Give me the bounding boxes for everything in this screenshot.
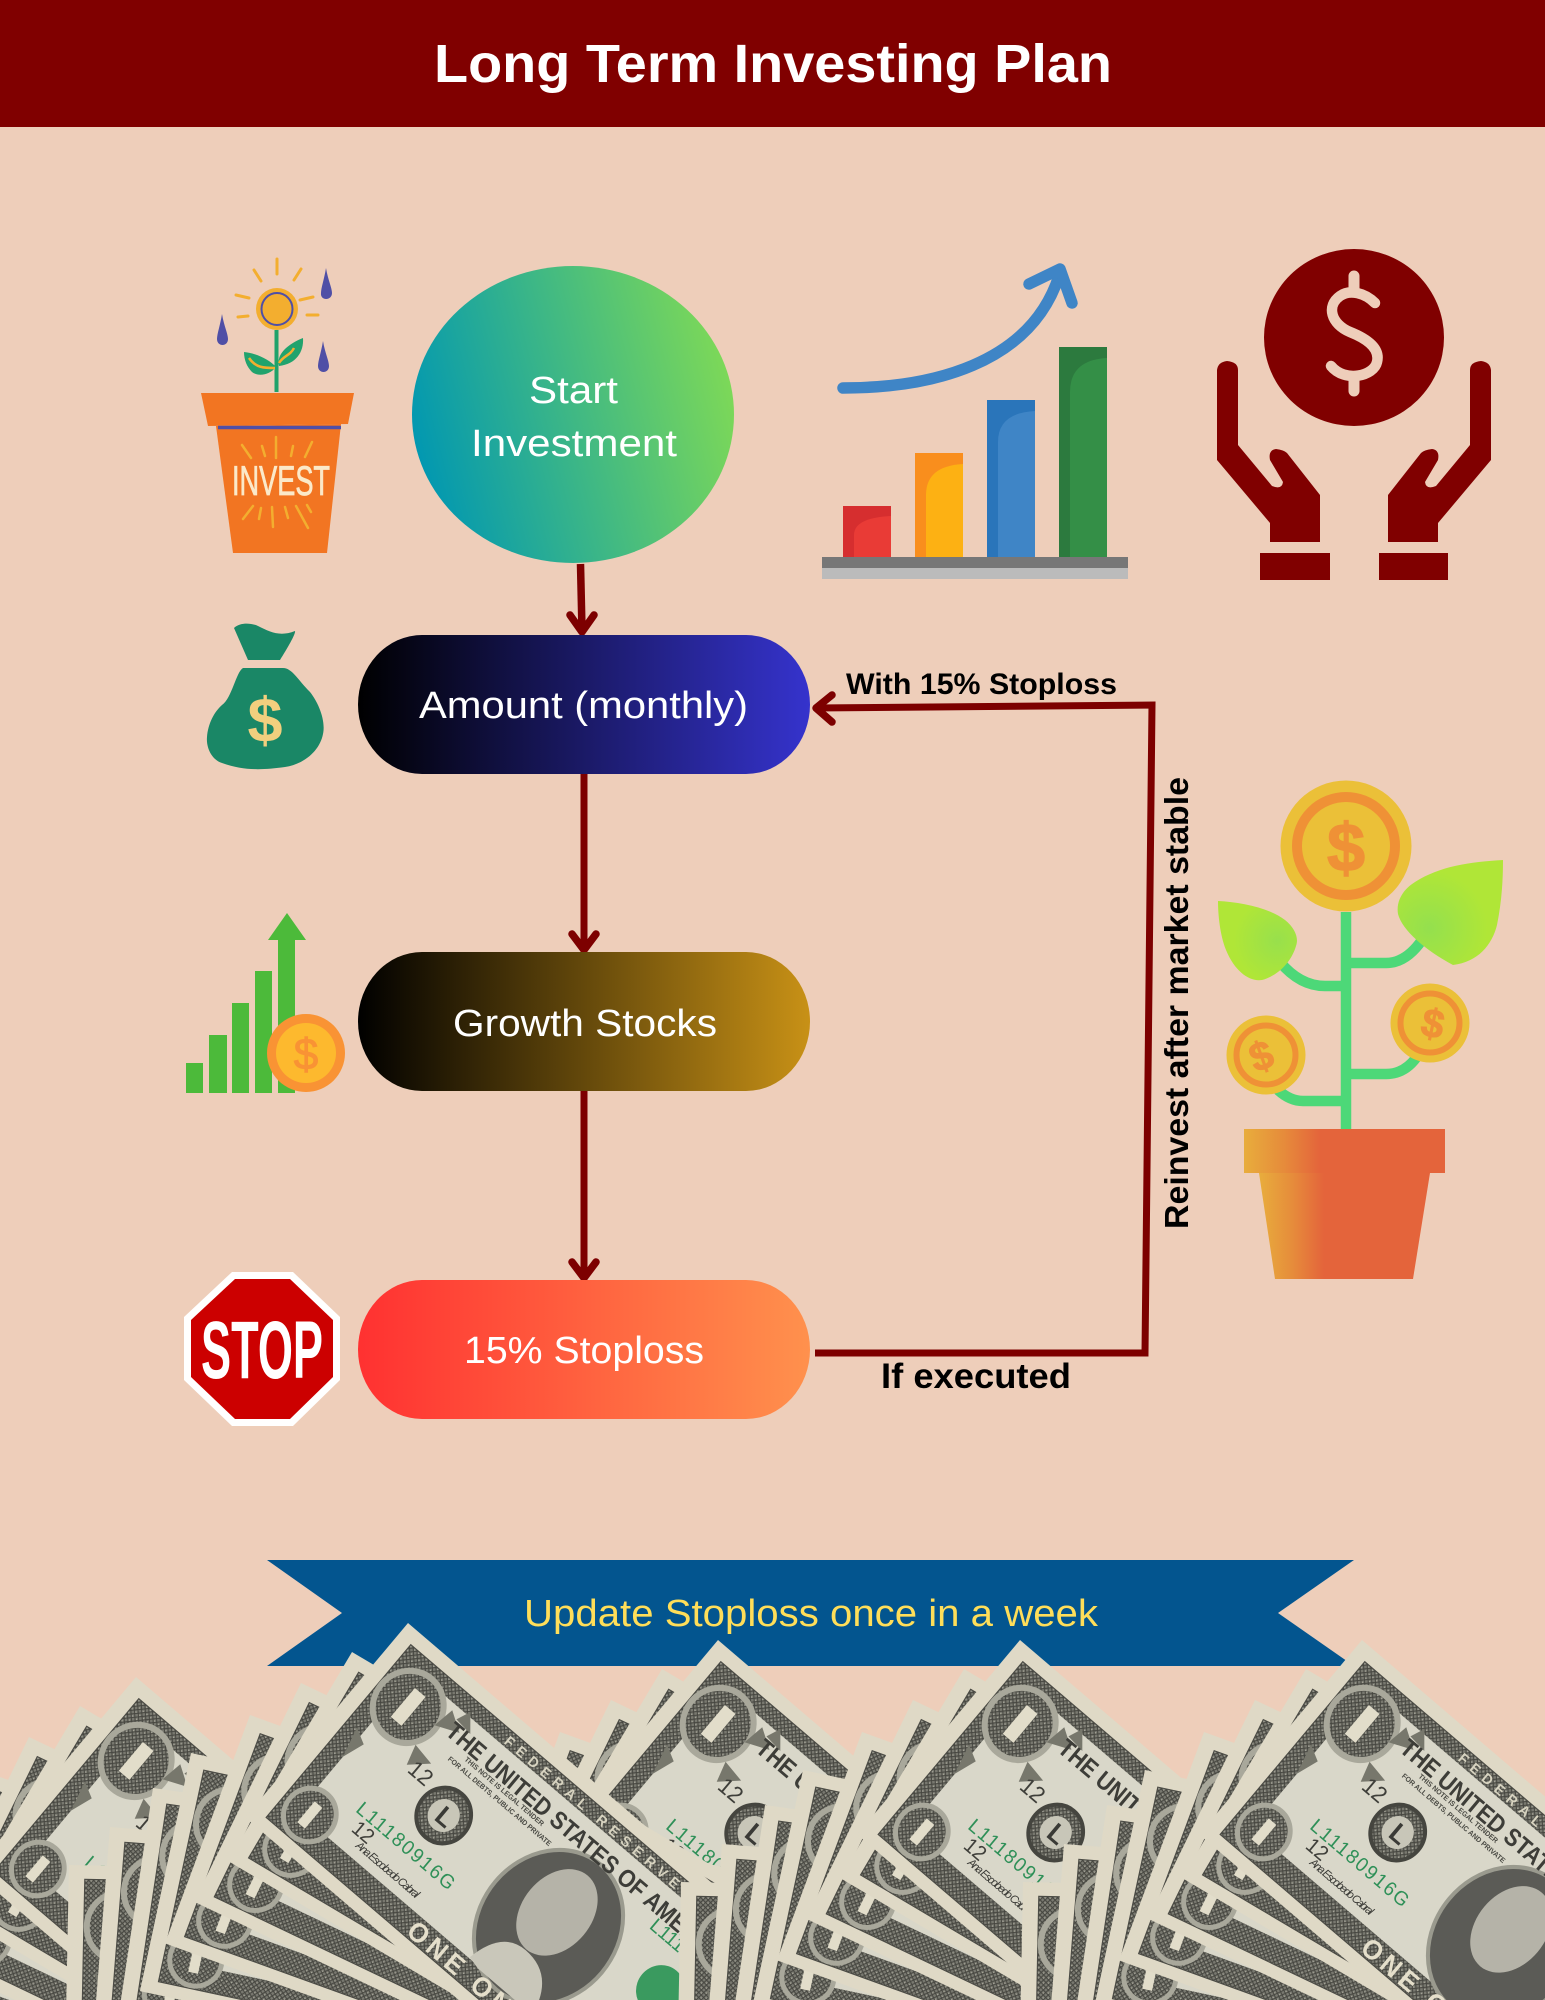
ribbon banner (267, 1560, 1354, 1666)
dollar bills pile: FOR ALL DEBTS, PUBLIC AND PRIVATE (1400, 1772, 1507, 1865)
arrow: start to amount (570, 564, 594, 632)
dollar bills pile: L11180916G (964, 1815, 1072, 1912)
icon: money plant (1218, 780, 1503, 1279)
dollar bills pile: Ana Escobedo Cabral (964, 1856, 1034, 1918)
feedback arrow into amount (815, 695, 1152, 1353)
node: growth stocks: Growth Stocks (453, 1003, 717, 1045)
icon: stop sign (184, 1272, 340, 1426)
dollar bills pile: L (739, 1817, 771, 1851)
dollar bills pile: 12 (713, 1773, 748, 1808)
start investment node: Start (529, 370, 618, 412)
dollar bills pile: L11180916G (1306, 1815, 1414, 1912)
icon: growth bars with coin: $ (294, 1030, 318, 1079)
arrow: growth to stoploss (572, 1091, 596, 1278)
node: amount monthly: Amount (monthly) (419, 685, 748, 727)
label: with 15% stoploss: With 15% Stoploss (846, 668, 1117, 701)
dollar bills pile: Ana Escobedo Cabral (1306, 1856, 1376, 1918)
icon: money bag: $ (247, 686, 283, 756)
node: growth stocks (358, 952, 810, 1091)
icon: money plant: $ (1327, 810, 1365, 886)
dollar bills pile: 12 (131, 1810, 166, 1845)
dollar bills pile: 12 (1357, 1773, 1392, 1808)
dollar bills pile: THIS NOTE IS LEGAL TENDER (1417, 1772, 1500, 1846)
icon: rising bar chart (822, 269, 1128, 579)
title banner (0, 0, 1545, 127)
label: reinvest after market stable: Reinvest after market stable (1158, 777, 1195, 1229)
icon: hands holding dollar coin (1217, 249, 1491, 580)
start investment node: Investment (471, 423, 677, 465)
start investment node (412, 266, 734, 563)
dollar bills pile: FEDERAL RESERVE NOTE (501, 1734, 739, 1941)
dollar bills pile: Ana Escobedo Cabral (352, 1839, 422, 1901)
dollar bills pile (0, 1623, 1545, 2000)
dollar bills pile: L (429, 1800, 461, 1834)
icon: money bag (207, 624, 324, 769)
icon: money plant: $ (1417, 1000, 1448, 1048)
dollar bills pile: THE UNITED STATES OF AMERICA (440, 1717, 733, 1973)
icon: invest flower pot: INVEST (232, 457, 330, 504)
dollar bills pile: L11180916G (80, 1852, 188, 1949)
arrow: amount to growth (572, 774, 596, 950)
ribbon banner: Update Stoploss once in a week (524, 1593, 1099, 1635)
node: amount monthly (358, 635, 810, 774)
dollar bills pile: L11180916G (352, 1798, 460, 1895)
icon: money plant: $ (1244, 1032, 1280, 1081)
node: 15% stoploss: 15% Stoploss (464, 1330, 704, 1372)
dollar bills pile: 12 (1301, 1833, 1333, 1866)
dollar bills pile: 12 (959, 1833, 991, 1866)
dollar bills pile: 12 (403, 1756, 438, 1791)
icon: growth bars with coin (186, 913, 345, 1093)
dollar bills pile: THIS NOTE IS LEGAL TENDER (463, 1755, 546, 1829)
dollar bills pile: 12 (347, 1816, 379, 1849)
icon: stop sign: STOP (201, 1305, 323, 1396)
dollar bills pile: L11180916G (662, 1815, 770, 1912)
dollar bills pile: L (1383, 1817, 1415, 1851)
dollar bills pile: L11180916G (645, 1914, 741, 2000)
title banner: Long Term Investing Plan (434, 34, 1112, 94)
node: 15% stoploss (358, 1280, 810, 1419)
dollar bills pile: 12 (1015, 1773, 1050, 1808)
icon: invest flower pot (201, 259, 354, 553)
dollar bills pile: L (1041, 1817, 1073, 1851)
label: if executed: If executed (881, 1357, 1071, 1396)
dollar bills pile: 12 (657, 1833, 689, 1866)
dollar bills pile: FOR ALL DEBTS, PUBLIC AND PRIVATE (446, 1755, 553, 1848)
